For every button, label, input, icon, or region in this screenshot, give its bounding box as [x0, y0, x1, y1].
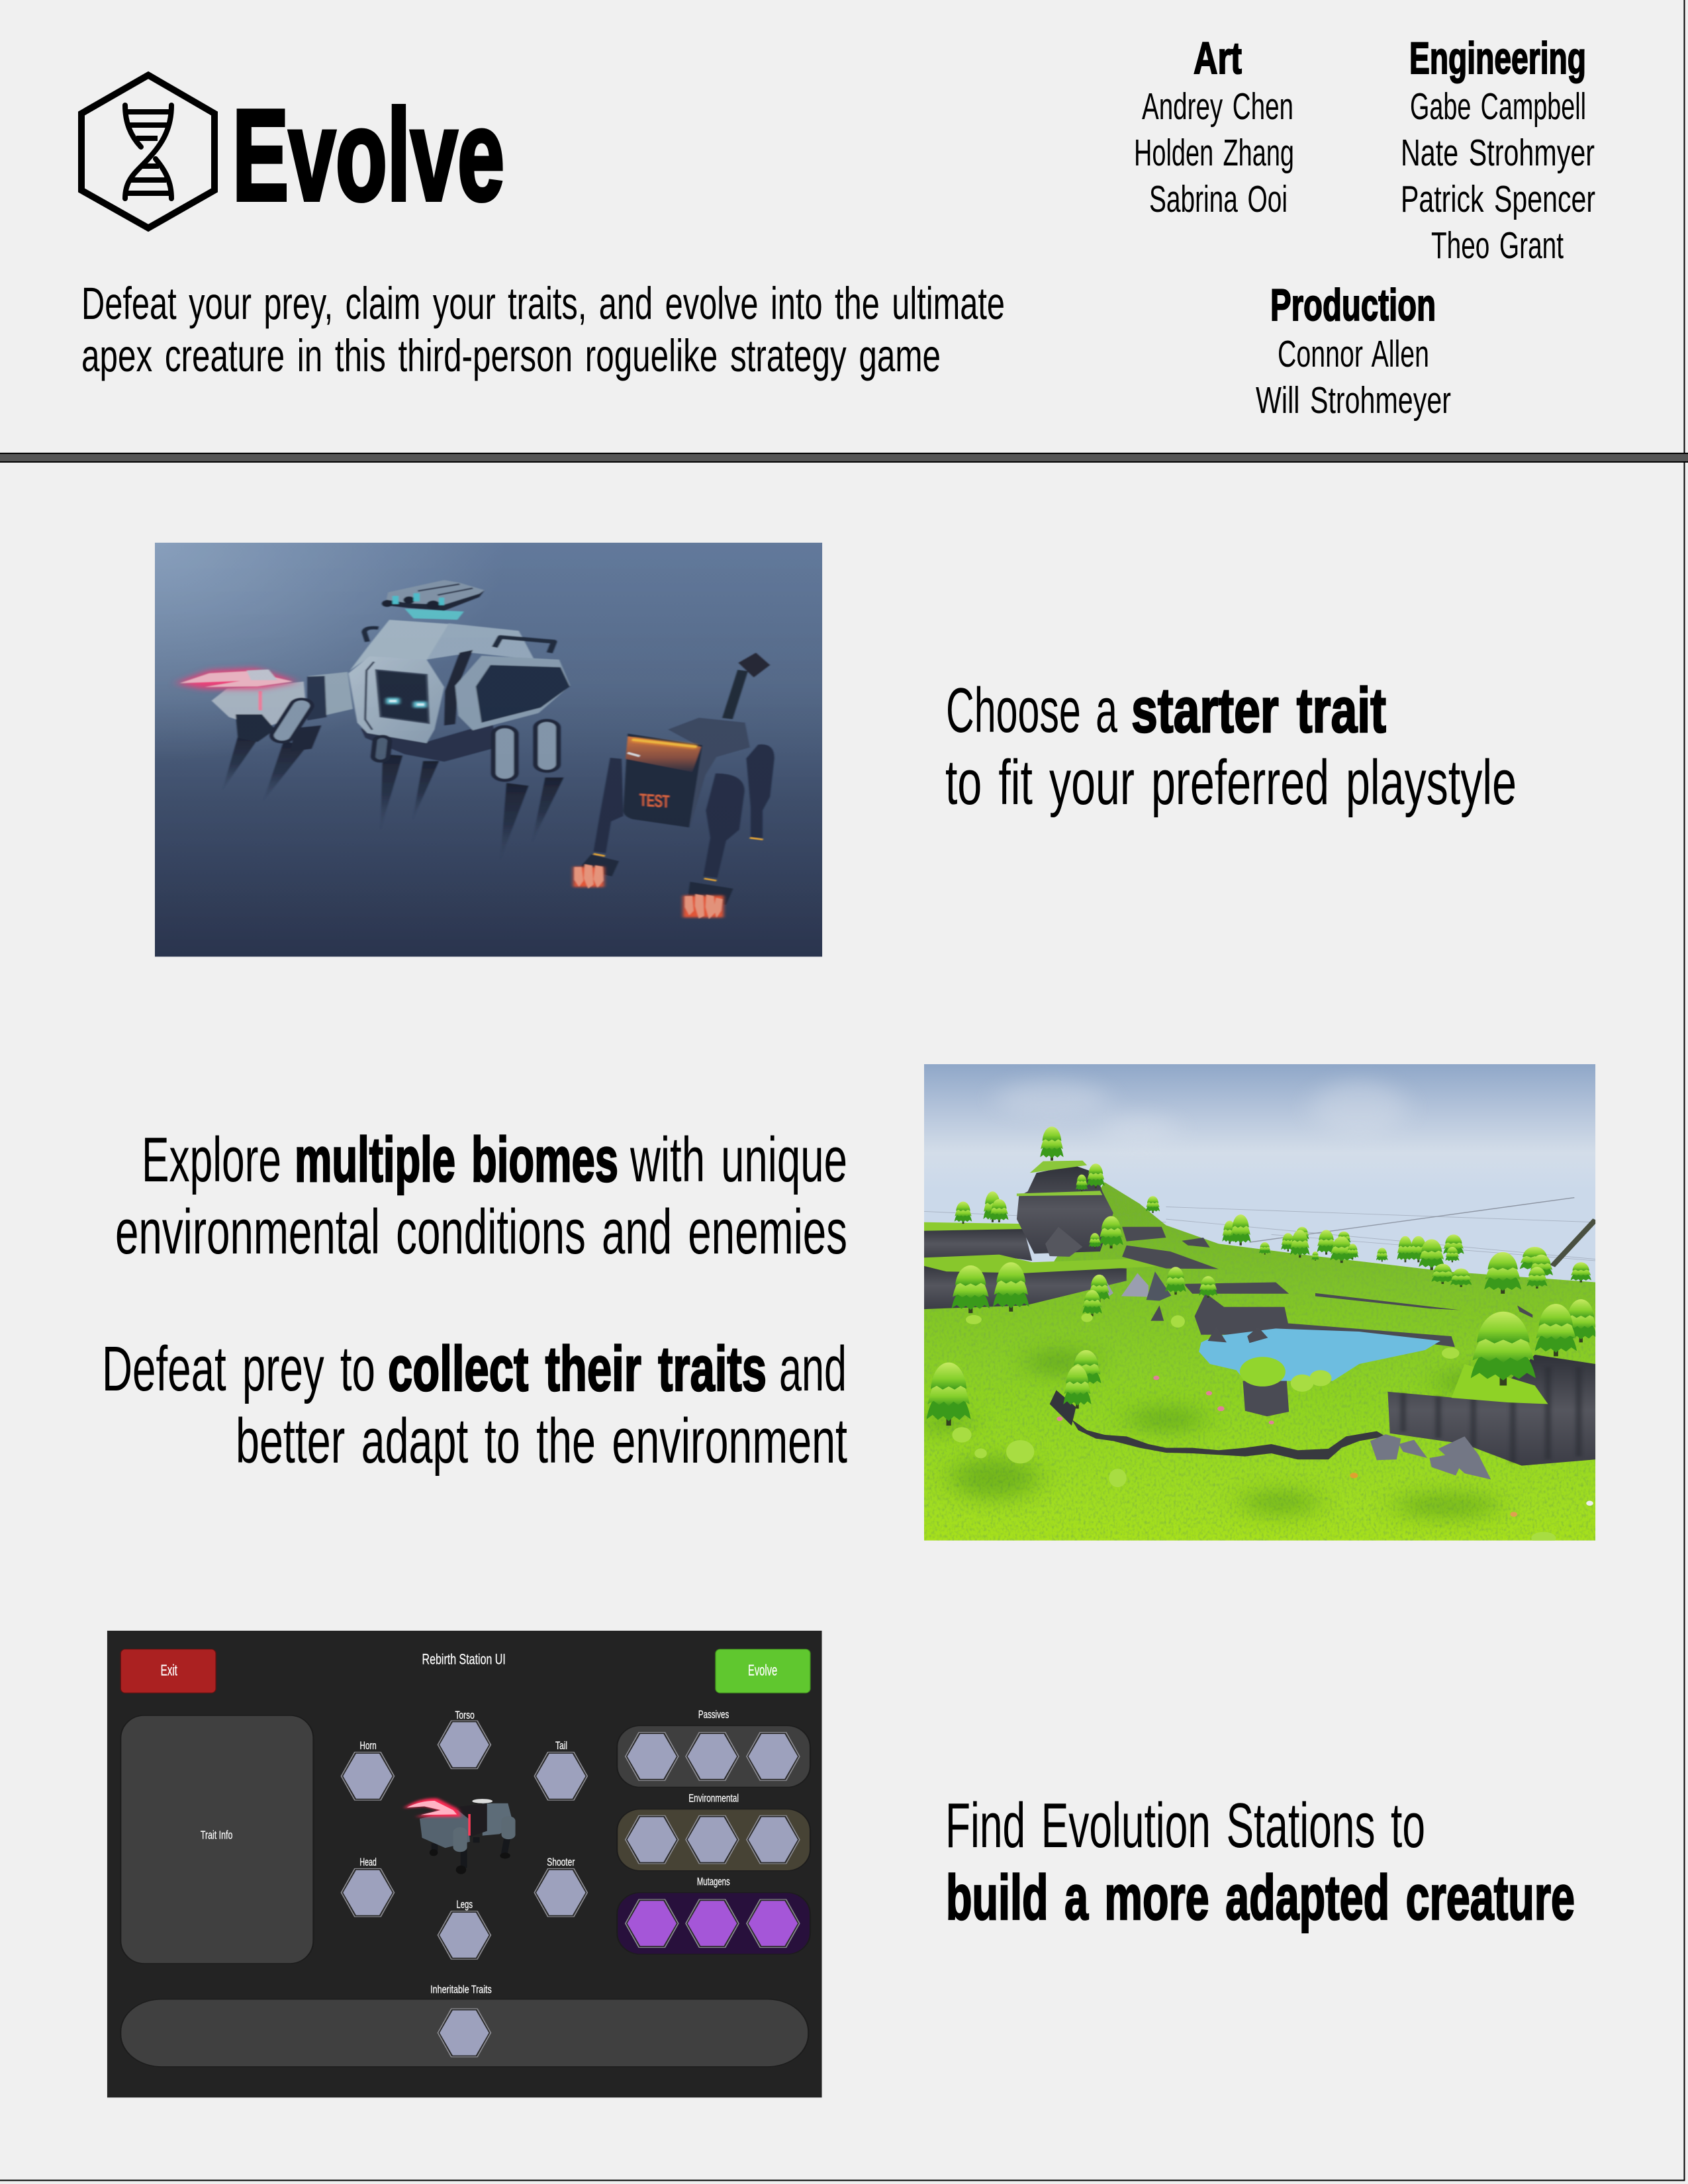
credits: engineering team: Patrick Spencer — [1401, 178, 1595, 220]
text: biomes: with unique — [630, 1124, 847, 1195]
header: logo and title — [81, 75, 504, 228]
evolve button: Evolve — [748, 1662, 777, 1679]
left plateau and mesa — [924, 1161, 1164, 1309]
mutagens panel — [617, 1876, 810, 1954]
screenshot: biome landscape — [920, 1064, 1597, 1544]
robot 2: glowing paws — [573, 854, 733, 919]
exit button — [120, 1649, 216, 1693]
grey rocks — [1102, 1271, 1491, 1480]
flowers — [1056, 1376, 1593, 1517]
icon: DNA hexagon logo — [81, 75, 214, 228]
credits: engineering team: Gabe Campbell — [1410, 85, 1586, 128]
text: biomes: Explore — [142, 1124, 281, 1195]
horizon grid — [924, 1198, 1595, 1261]
bushes — [952, 1314, 1556, 1544]
robot 1: body — [348, 619, 570, 762]
text: evolution stations — [945, 1790, 1575, 1933]
slot labels: Tail — [555, 1739, 567, 1752]
tagline: Defeat your prey, claim your traits, and evolve into the ultimate — [81, 278, 1005, 329]
tagline — [81, 278, 1005, 381]
credits: art team: Andrey Chen — [1142, 85, 1293, 128]
creature preview — [403, 1798, 516, 1874]
trees — [927, 1126, 1597, 1426]
shadow patches — [920, 1350, 1548, 1518]
robot 2: legs — [594, 745, 774, 878]
sky — [924, 1064, 1595, 1283]
terraces — [1122, 1227, 1532, 1318]
credits: art team: Art — [1194, 33, 1242, 83]
text: collect traits: Defeat prey to — [102, 1334, 375, 1404]
body slot hexagons — [341, 1721, 587, 1959]
environmental panel: Environmental — [688, 1792, 739, 1804]
credits: production team: Will Strohmeyer — [1256, 379, 1451, 422]
slot labels: Legs — [456, 1898, 473, 1911]
text: starter trait — [945, 675, 1517, 818]
credits: production team: Connor Allen — [1278, 333, 1429, 375]
evolve button — [716, 1649, 810, 1693]
robot 1: arm and claw — [175, 668, 353, 751]
credits: art team: Sabrina Ooi — [1149, 178, 1288, 220]
trait info panel — [120, 1715, 313, 1964]
slot labels: Torso — [455, 1709, 475, 1721]
robot 2 — [573, 653, 774, 919]
passives panel: Passives — [698, 1708, 729, 1721]
credits: engineering team: Theo Grant — [1431, 224, 1564, 267]
robot 1 — [175, 580, 570, 860]
text: collect traits: and — [779, 1334, 847, 1404]
robot 1: turret — [382, 580, 485, 619]
lake and cliff — [1195, 1293, 1455, 1381]
screenshot: starter trait robots — [155, 543, 822, 957]
mutagens panel: Mutagens — [697, 1876, 730, 1888]
title: Evolve — [232, 83, 504, 228]
trait info panel: Trait Info — [201, 1829, 232, 1842]
rim ledge — [1072, 1420, 1385, 1459]
slot labels — [360, 1709, 575, 1911]
terrain — [924, 1182, 1595, 1541]
slot labels: Head — [360, 1856, 377, 1868]
text: collect traits: collect their traits — [388, 1334, 767, 1404]
inheritable traits panel — [120, 1983, 808, 2067]
environmental panel — [617, 1792, 810, 1871]
credits: art team: Holden Zhang — [1134, 132, 1294, 174]
text: evolution stations: Find Evolution Stations to — [945, 1790, 1425, 1861]
header divider — [0, 453, 1688, 462]
UI background — [107, 1631, 822, 2097]
slot labels: Horn — [360, 1739, 377, 1752]
robot 1: eyes — [386, 698, 427, 707]
text: biomes: multiple biomes — [295, 1124, 618, 1195]
credits: engineering team: Nate Strohmyer — [1401, 132, 1595, 174]
passives panel — [617, 1708, 810, 1787]
robot 2: TEST — [639, 791, 669, 811]
pillar rock — [1240, 1357, 1289, 1416]
text: starter trait: Choose a — [946, 675, 1117, 746]
inheritable traits panel: Inheritable Traits — [430, 1983, 492, 1995]
exit button: Exit — [161, 1662, 177, 1679]
robot 1: spike legs — [222, 734, 563, 860]
text: biomes — [115, 1124, 847, 1267]
text: collect traits — [102, 1334, 847, 1477]
credits: engineering team: Engineering — [1409, 33, 1586, 83]
tagline: apex creature in this third-person roguelike strategy game — [81, 330, 941, 381]
screenshot: rebirth station UI — [107, 1631, 822, 2097]
screenshot: rebirth station UI: Rebirth Station UI — [422, 1651, 506, 1668]
credits: production team — [1256, 280, 1451, 422]
robot 1: knee joints — [373, 721, 559, 780]
credits: production team: Production — [1270, 280, 1436, 330]
right cliff — [1387, 1355, 1595, 1466]
atmospheric haze — [179, 594, 763, 919]
text: starter trait: starter trait — [1131, 675, 1386, 746]
robot 1: glowing pink blade — [175, 668, 297, 689]
credits: art team — [1134, 33, 1294, 220]
text: biomes: environmental conditions and enemies — [115, 1197, 847, 1267]
credits: engineering team — [1401, 33, 1595, 267]
text: collect traits: better adapt to the environment — [236, 1406, 847, 1477]
screenshot: rebirth station UI: Shooter — [547, 1856, 575, 1868]
